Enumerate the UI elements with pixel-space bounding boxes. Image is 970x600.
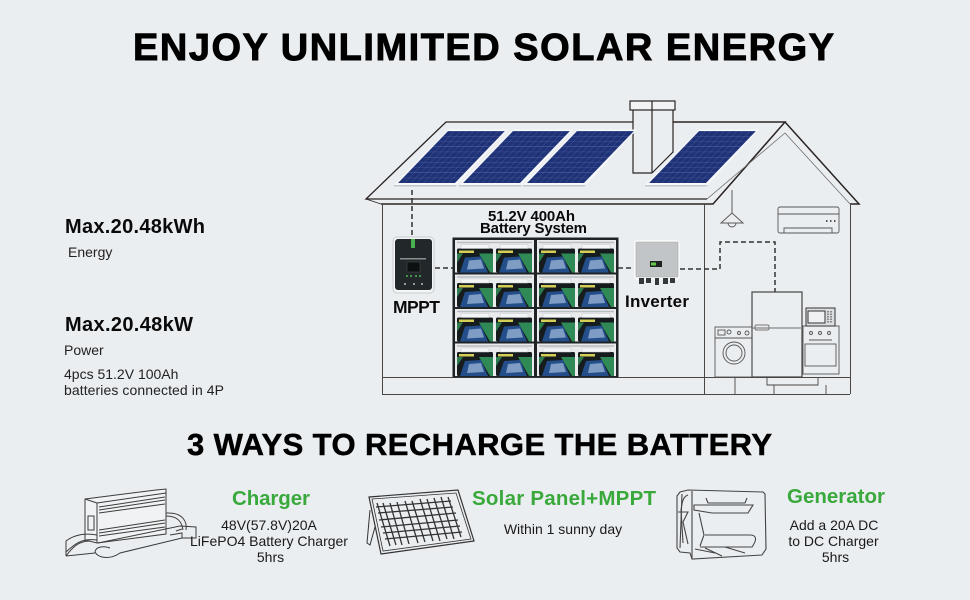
charger details: LiFePO4 Battery Charger xyxy=(190,533,348,549)
icon: air conditioner xyxy=(778,207,839,233)
icon: MPPT controller xyxy=(393,237,434,293)
generator details: 5hrs xyxy=(822,549,849,565)
charger details: 48V(57.8V)20A xyxy=(221,517,318,533)
house diagram xyxy=(366,101,859,394)
icon: ceiling lamp xyxy=(721,190,743,227)
section heading: 3 WAYS TO RECHARGE THE BATTERY xyxy=(187,427,772,462)
battery configuration note line 2: batteries connected in 4P xyxy=(64,382,224,398)
charger details xyxy=(190,517,348,565)
battery system heading: 51.2V 400Ah xyxy=(488,208,575,225)
icon: inverter xyxy=(634,240,680,285)
solar panel 1 xyxy=(394,130,508,186)
icon: folding solar panel xyxy=(367,490,474,554)
icon: stove and oven xyxy=(803,326,839,374)
battery row 1 xyxy=(455,240,616,272)
roof outline xyxy=(366,122,859,204)
solar panel 2 xyxy=(459,130,573,186)
dashed wiring xyxy=(412,190,775,292)
solar panel 3 xyxy=(523,130,637,186)
MPPT label: MPPT xyxy=(393,297,440,317)
energy value: Max.20.48kWh xyxy=(65,216,205,238)
panel: energy and power specs xyxy=(64,216,224,398)
solar panel 4 xyxy=(645,130,759,186)
solar panel details: Within 1 sunny day xyxy=(504,521,622,537)
icon: washing machine xyxy=(715,327,752,377)
solar panels on roof xyxy=(394,130,759,186)
icon: battery charger xyxy=(66,489,196,557)
solar panel heading: Solar Panel+MPPT xyxy=(472,487,656,510)
Inverter label: Inverter xyxy=(625,292,689,311)
battery system heading: Battery System xyxy=(480,220,587,237)
panel: charger option xyxy=(66,487,348,565)
generator details: Add a 20A DC xyxy=(790,517,878,533)
power value: Max.20.48kW xyxy=(65,314,193,336)
battery configuration note: 4pcs 51.2V 100Ah xyxy=(64,366,178,382)
icon: refrigerator xyxy=(752,292,802,377)
battery system heading xyxy=(480,208,587,237)
charger heading: Charger xyxy=(232,487,310,510)
battery row 2 xyxy=(455,274,616,307)
battery rack xyxy=(452,238,618,378)
charger details: 5hrs xyxy=(257,549,284,565)
generator heading: Generator xyxy=(787,485,885,508)
title: ENJOY UNLIMITED SOLAR ENERGY xyxy=(133,27,834,69)
generator details xyxy=(788,517,879,565)
panel: generator option xyxy=(677,485,885,565)
generator details: to DC Charger xyxy=(788,533,879,549)
panel: solar panel option xyxy=(367,487,656,554)
icon: microwave xyxy=(806,308,835,326)
walls and floor xyxy=(382,204,850,394)
energy label: Energy xyxy=(68,244,112,260)
chimney xyxy=(630,101,675,173)
power label: Power xyxy=(64,342,104,358)
battery row 4 xyxy=(455,344,616,376)
icon: generator xyxy=(677,490,766,559)
battery row 3 xyxy=(455,309,616,342)
